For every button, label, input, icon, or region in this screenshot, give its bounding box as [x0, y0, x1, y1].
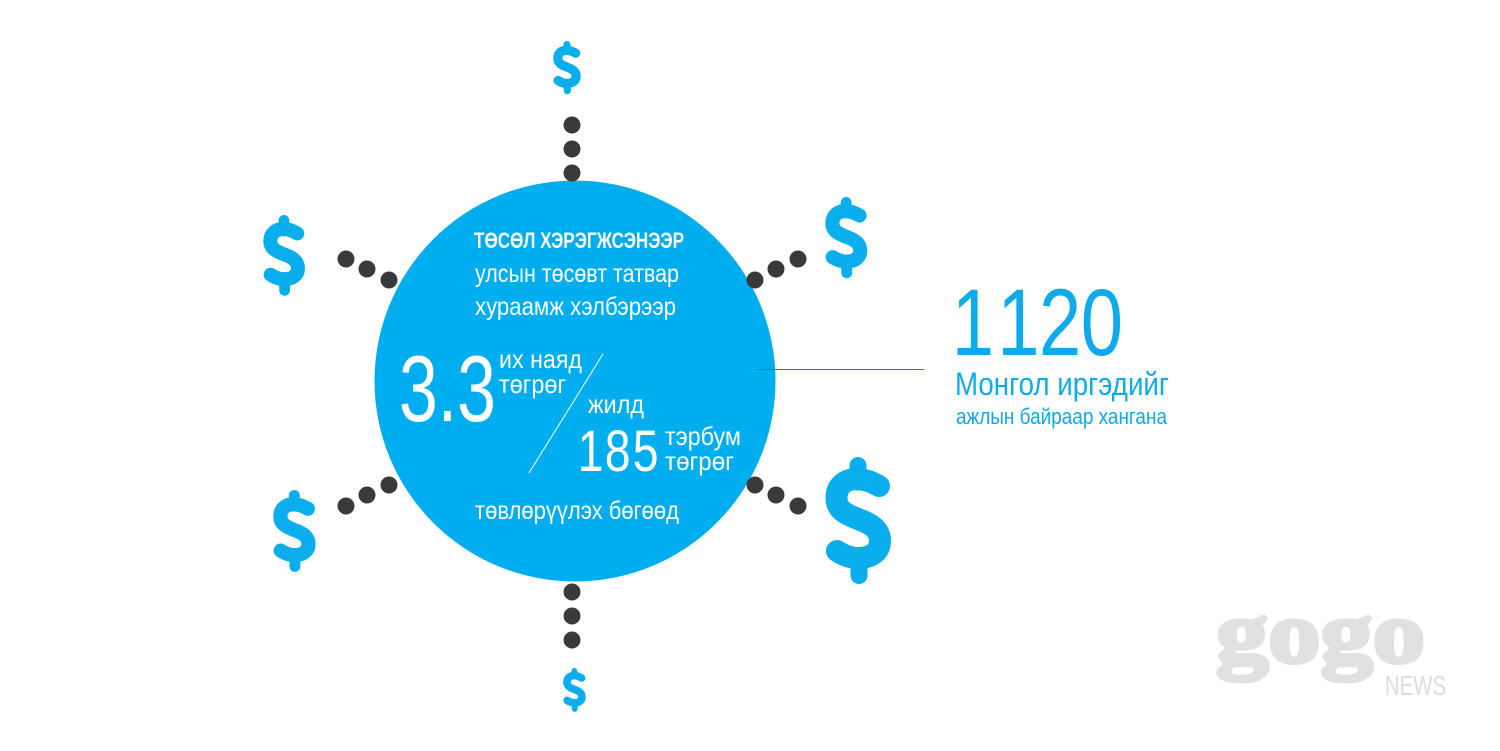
dots: upper left	[338, 250, 398, 288]
connector line	[758, 368, 924, 370]
icon: dollar bottom	[567, 671, 582, 709]
icon: dollar top	[558, 45, 576, 91]
dots: lower right	[746, 476, 806, 514]
logo: news: NEWS	[1385, 670, 1446, 701]
number 1120: 1120	[952, 270, 1123, 376]
unit: billion: тэрбум	[665, 421, 741, 451]
icon: dollar lower right	[836, 466, 880, 576]
unit: tugrik 2: төгрөг	[665, 446, 734, 476]
number 185: 185	[578, 419, 659, 484]
dots: upper right	[746, 250, 806, 288]
unit: trillion: их наяд	[499, 344, 582, 374]
dots: top	[564, 116, 580, 182]
central circle	[374, 180, 776, 582]
logo: gogo: gogo	[1216, 585, 1425, 682]
number 3.3: 3.3	[399, 336, 496, 441]
circle text bottom: төвлөрүүлэх бөгөөд	[475, 497, 679, 525]
icon: dollar upper left	[270, 220, 298, 290]
icon: dollar lower left	[280, 495, 308, 566]
heading in circle: ТӨСӨЛ ХЭРЭГЖСЭНЭЭР	[474, 228, 684, 253]
caption line 1: Монгол иргэдийг	[955, 366, 1169, 402]
slash divider	[529, 354, 603, 473]
caption line 2: ажлын байраар хангана	[956, 404, 1168, 429]
circle text line 1: улсын төсөвт татвар	[475, 260, 679, 288]
circle text line 2: хураамж хэлбэрээр	[475, 293, 676, 321]
unit: tugrik: төгрөг	[499, 369, 566, 399]
dots: lower left	[338, 476, 398, 514]
dots: bottom	[564, 584, 580, 648]
icon: dollar upper right	[832, 202, 860, 273]
unit: year: жилд	[588, 389, 644, 419]
